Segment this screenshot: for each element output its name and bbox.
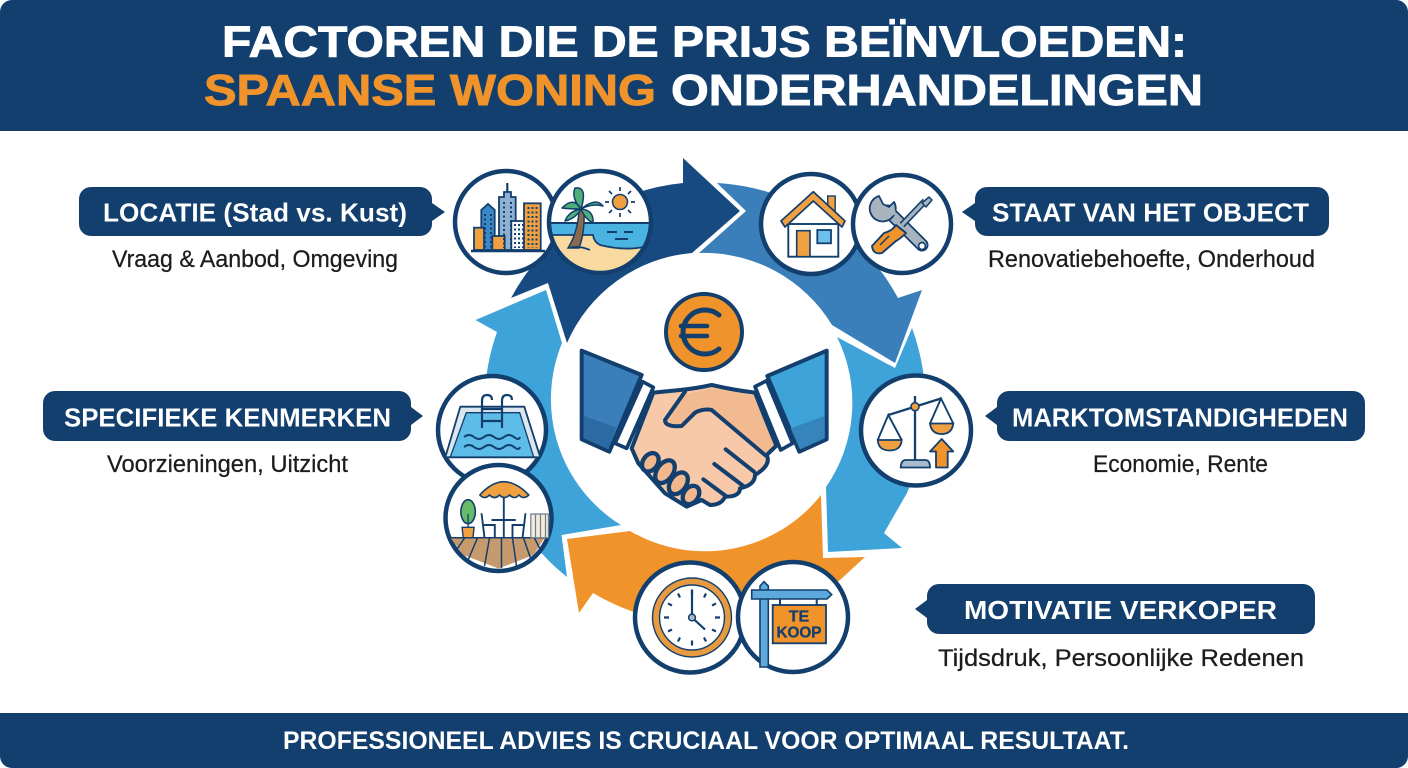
callout subtext: Vraag & Aanbod, Omgeving xyxy=(112,246,398,273)
cycle arrow: left light blue xyxy=(476,290,621,577)
left sleeve shadow xyxy=(584,416,616,449)
callout heading: MOTIVATIE VERKOPER xyxy=(964,595,1277,625)
right sleeve shadow xyxy=(791,416,825,449)
callout heading: SPECIFIEKE KENMERKEN xyxy=(64,402,391,432)
icon: pool xyxy=(438,376,546,484)
icon: balance scale xyxy=(861,376,971,486)
cycle arrow: medium blue xyxy=(699,183,922,363)
icon: terrace xyxy=(446,465,552,571)
callout heading: MARKTOMSTANDIGHEDEN xyxy=(1012,402,1348,432)
icon: clock xyxy=(635,562,745,672)
back of upper hand xyxy=(665,388,774,453)
title line 2: SPAANSE WONING xyxy=(204,66,656,115)
title line 2 continued: ONDERHANDELINGEN xyxy=(671,66,1203,115)
icon: for-sale sign xyxy=(738,562,848,672)
icon: euro coin xyxy=(666,294,742,370)
screwdriver xyxy=(902,201,925,225)
callout: marktomstandigheden xyxy=(985,391,1365,478)
callout: specifieke kenmerken xyxy=(43,391,423,478)
icon: handshake xyxy=(582,351,827,507)
callout subtext: Renovatiebehoefte, Onderhoud xyxy=(988,246,1315,273)
sign text: TE xyxy=(789,609,810,626)
icon: house xyxy=(761,174,861,274)
callout heading: STAAT VAN HET OBJECT xyxy=(992,198,1309,228)
icon: city xyxy=(455,171,557,273)
cycle arrow: dark blue xyxy=(511,158,740,343)
callout: locatie xyxy=(79,187,445,273)
left cuff xyxy=(615,382,653,448)
callout subtext: Tijdsdruk, Persoonlijke Redenen xyxy=(938,645,1304,672)
callout: staat van het object xyxy=(962,187,1329,273)
callout subtext: Voorzieningen, Uitzicht xyxy=(107,451,348,478)
thumb and finger lines xyxy=(665,392,765,497)
footer band xyxy=(0,713,1408,768)
header band xyxy=(0,0,1408,131)
left sleeve xyxy=(582,351,642,452)
hands xyxy=(632,385,776,507)
icon: beach xyxy=(548,171,652,274)
callout heading: LOCATIE (Stad vs. Kust) xyxy=(103,198,407,228)
sign text line 2: KOOP xyxy=(776,625,822,642)
footer text: PROFESSIONEEL ADVIES IS CRUCIAAL VOOR OPTIMAAL RESULTAAT. xyxy=(283,727,1129,755)
icon: tools xyxy=(853,175,951,273)
right cuff xyxy=(755,381,793,450)
title line 1: FACTOREN DIE DE PRIJS BEÏNVLOEDEN: xyxy=(222,18,1187,66)
callout: motivatie verkoper xyxy=(915,584,1315,672)
callout subtext: Economie, Rente xyxy=(1093,451,1268,478)
right sleeve xyxy=(767,351,827,452)
cycle arrow: orange xyxy=(567,495,865,624)
cycle arrow: right light blue xyxy=(826,328,926,552)
gripping fingers xyxy=(639,450,703,507)
wrench xyxy=(888,211,922,245)
